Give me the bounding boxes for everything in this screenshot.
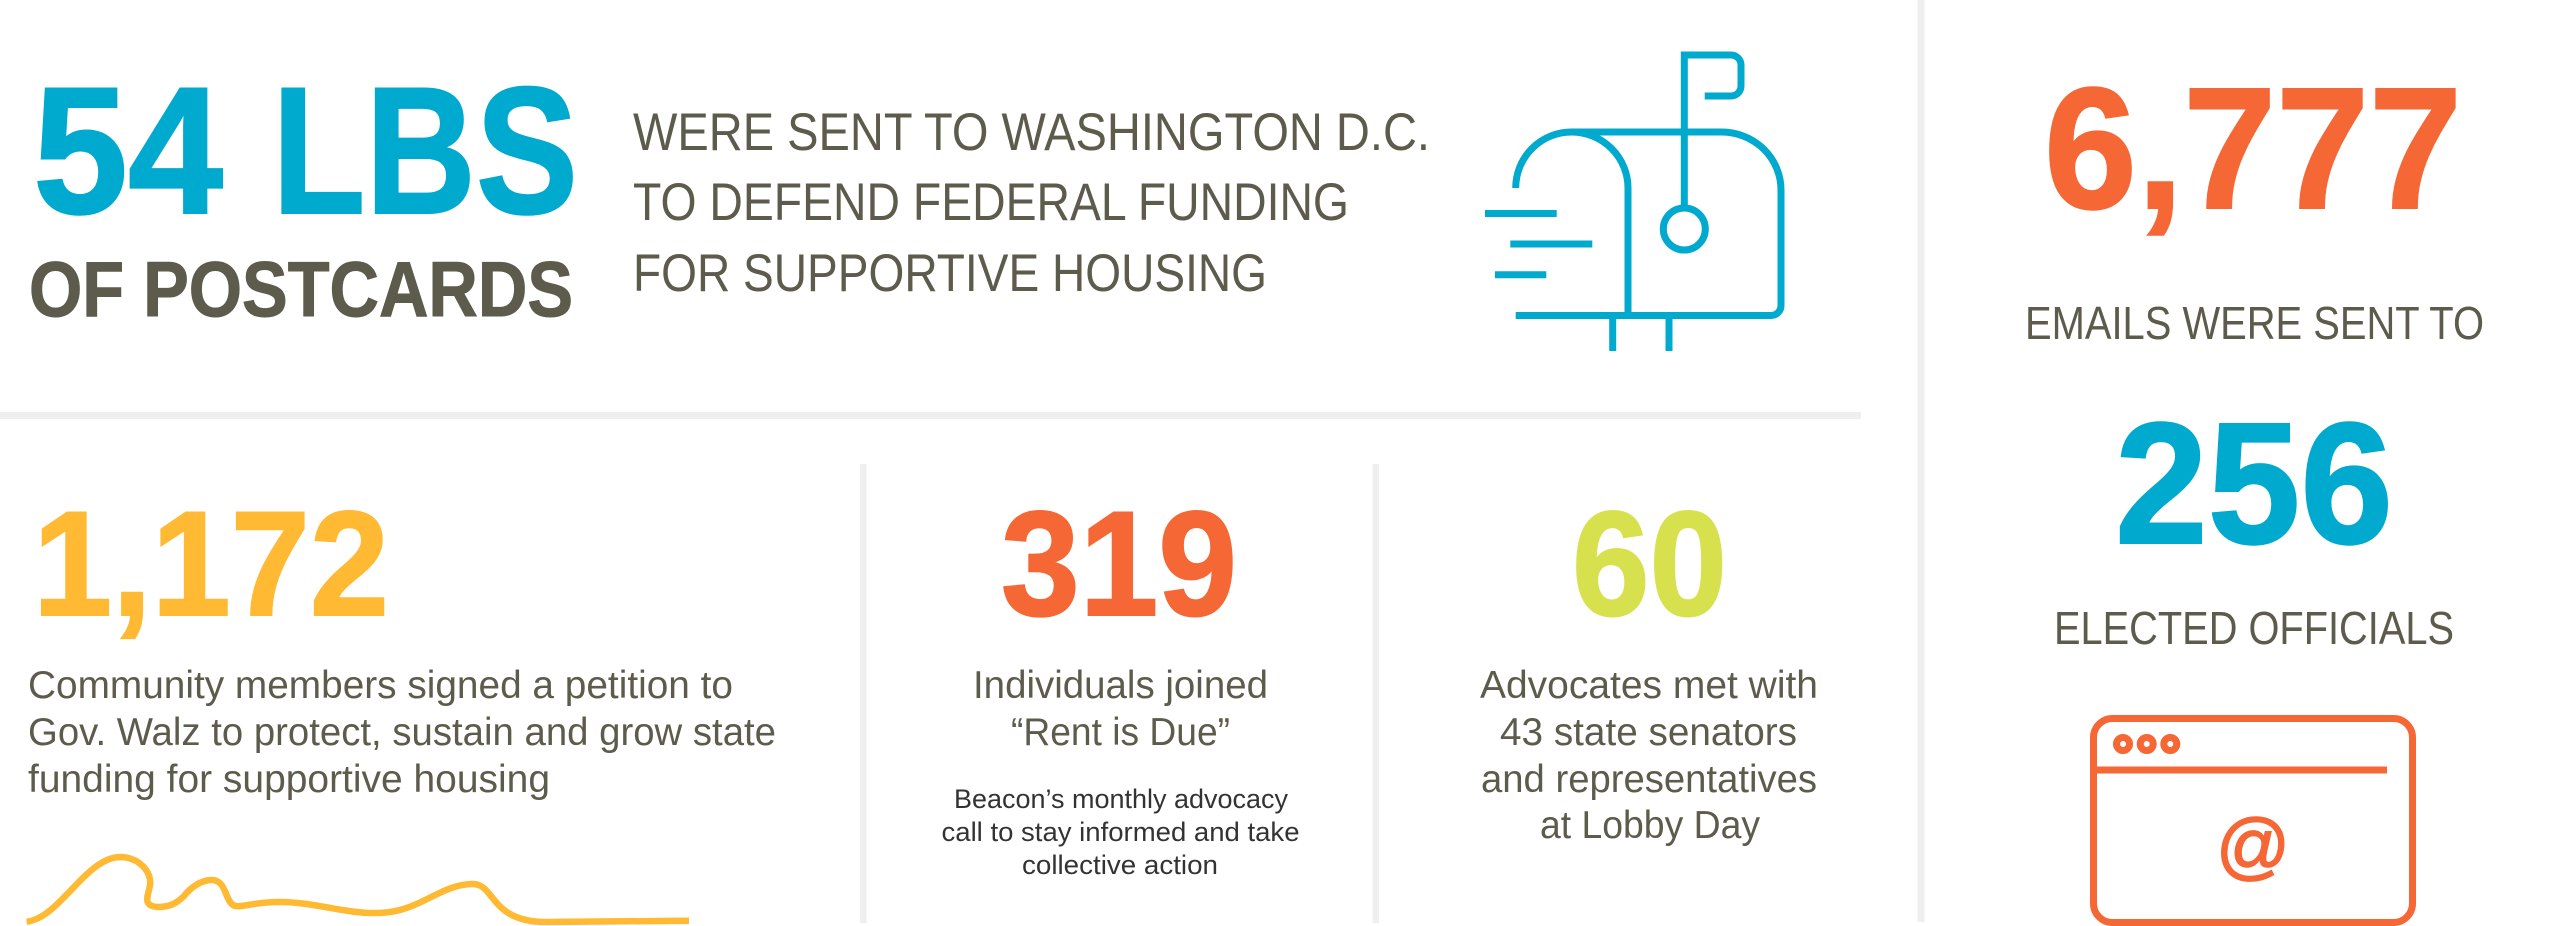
big number: 54 LBS (33, 50, 578, 252)
rent is due description: “Rent is Due” (1011, 711, 1230, 754)
panel: lobby day (1480, 480, 1818, 847)
big number: 54 LBS: 54 (33, 50, 223, 252)
petition description: Gov. Walz to protect, sustain and grow state (28, 711, 776, 754)
postcards description: FOR SUPPORTIVE HOUSING (633, 244, 1267, 303)
decorative squiggle line (27, 857, 689, 922)
petition description: Community members signed a petition to (28, 664, 733, 707)
panel: emails (2025, 51, 2484, 922)
petition description (28, 664, 776, 801)
lobby day description: Advocates met with (1480, 664, 1818, 707)
lobby day description (1480, 664, 1818, 847)
icon: mailbox (1485, 55, 1781, 351)
petition description: funding for supportive housing (28, 758, 550, 801)
postcards description (633, 103, 1430, 303)
big number: 60: 60 (1572, 480, 1727, 647)
panel: petition (27, 480, 776, 922)
heading: of postcards: OF POSTCARDS (29, 245, 573, 333)
postcards description: WERE SENT TO WASHINGTON D.C. (633, 103, 1430, 162)
rent is due description (973, 664, 1268, 754)
emails label: EMAILS WERE SENT TO (2025, 297, 2484, 349)
big number: 54 LBS: LBS (272, 50, 578, 252)
icon: email browser window: @ (2216, 804, 2290, 887)
icon: email browser window (2094, 718, 2412, 922)
rent is due note: call to stay informed and take (942, 817, 1300, 847)
rent is due description: Individuals joined (973, 664, 1268, 707)
panel: postcards (29, 50, 1781, 351)
big number: 1,172: 1,172 (33, 480, 389, 647)
lobby day description: at Lobby Day (1540, 804, 1760, 847)
rent is due note: Beacon’s monthly advocacy (954, 784, 1288, 814)
big number: 6,777: 6,777 (2044, 51, 2462, 245)
panel: rent is due (942, 480, 1300, 880)
elected officials label: ELECTED OFFICIALS (2054, 602, 2454, 654)
big number: 319: 319 (1001, 480, 1237, 647)
rent is due note: collective action (1022, 850, 1218, 880)
rent is due note (942, 784, 1300, 880)
postcards description: TO DEFEND FEDERAL FUNDING (633, 173, 1349, 232)
lobby day description: 43 state senators (1500, 711, 1797, 754)
big number: 256: 256 (2115, 386, 2393, 580)
lobby day description: and representatives (1481, 758, 1817, 801)
